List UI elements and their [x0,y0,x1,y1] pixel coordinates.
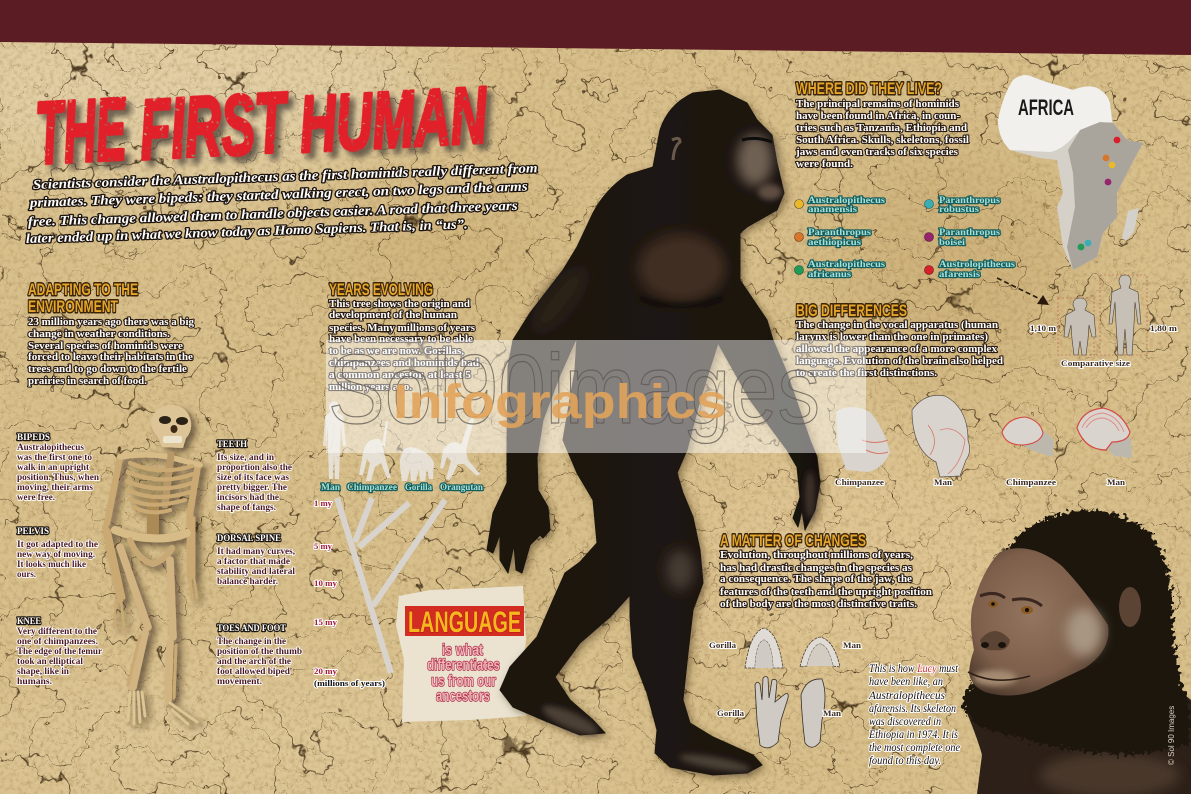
section: where did they live: WHERE DID THEY LIVE? [796,79,942,98]
skull: man [1077,408,1132,458]
skull and head diagrams: Man [934,478,952,487]
time scale labels: 5 my [314,541,333,551]
legend: Australopithecus anamensis: Australopithecus [808,196,885,206]
note: teeth: shape of fangs. [217,502,276,513]
section: adapting to the environment: ENVIRONMENT [28,297,118,316]
Lucy caption: found to this day. [869,755,941,767]
section: where did they live [795,79,969,170]
note: toes and foot: and the arch of the [217,656,292,667]
note: dorsal spine [217,533,296,587]
note: knee: one of chimpanzees. [17,636,98,647]
skeleton illustration [105,405,200,724]
section: adapting to the environment: Several species of hominids were [28,341,183,352]
note: teeth: incisors had the [217,492,280,503]
note: bipeds: was the first one to [17,452,92,463]
map label: AFRICA [1018,95,1074,120]
legend: Australopithecus africanus: Australopithecus [808,260,885,270]
watermark overlay: Infographics [393,376,727,429]
language callout: differentiates [427,657,500,674]
evolution tree chart [314,401,484,688]
jaw, hand and foot diagrams [709,628,861,748]
note: knee: took an elliptical [17,656,83,667]
legend: Australopithecus africanus [794,260,885,280]
man jaw [800,637,840,667]
section: big differences [796,301,1003,379]
note: pelvis: new way of moving. [17,549,95,560]
title: FIRST [137,76,292,178]
comparative size figures: Comparative size [1061,359,1130,368]
note: toes and foot [217,623,302,687]
jaw, hand and foot diagrams: Gorilla [709,641,737,650]
section: big differences: language. Evolution of the brain also helped [796,356,1003,367]
note: toes and foot: The change in the [217,636,287,647]
Lucy caption: the most complete one [869,742,960,754]
section: where did they live: tries such as Tanzania, Ethiopia and [796,123,967,134]
intro text: free. This change allowed them to handle objects easier. A road that three years [28,198,518,229]
note: dorsal spine: balance harder. [217,576,278,587]
jaw, hand and foot diagrams: Gorilla [717,709,745,718]
note: bipeds: Australopithecus [17,442,84,453]
note: pelvis: It looks much like [17,559,87,570]
head: man [912,395,970,477]
Lucy caption: Ethiopia in 1974. It is [868,729,959,741]
note: pelvis: It got adapted to the [17,539,99,550]
note: toes and foot: movement. [217,676,262,687]
skull and head diagrams: Man [1107,478,1125,487]
section: adapting to the environment: ADAPTING TO THE [28,280,138,299]
Lucy caption [868,663,960,767]
legend: Paranthropus aethiopicus [794,228,871,248]
time scale labels: 1 my [314,498,333,508]
note: knee: Very different to the [17,626,98,637]
watermark overlay: Sol90images [328,334,820,444]
map of Africa [998,75,1143,270]
language callout [396,586,526,722]
note: teeth [217,439,293,513]
body silhouette [487,90,820,775]
section: years evolving: a common ancestor, at least 5 [329,370,471,381]
note: pelvis: PELVIS [17,526,49,537]
section: big differences: to create the first distinctions. [796,368,937,379]
legend: Australopithecus africanus: africanus [808,270,851,280]
section: adapting to the environment: forced to leave their habitats in the [28,352,193,363]
note: teeth: TEETH [217,439,247,450]
species labels: Gorilla [405,483,432,493]
legend: Australopithecus anamensis: anamensis [808,205,857,215]
species legend [794,196,1015,280]
section: a matter of changes: of the body are the most distinctive traits. [720,599,917,610]
Lucy caption: have been like, an [869,676,943,688]
legend: Paranthropus boisei [924,228,1000,248]
intro text: primates. They were bipeds: they started walking erect, on two legs and the arms [28,178,528,210]
section: a matter of changes [720,531,932,610]
note: toes and foot: TOES AND FOOT [217,623,287,634]
intro text: Scientists consider the Australopithecus as the first hominids really different from [33,160,538,192]
legend: Paranthropus aethiopicus: aethiopicus [808,238,861,248]
section: where did they live: South Africa. Skulls, skeletons, fossil [796,135,969,146]
title: THE [33,79,130,183]
skull and head diagrams: Chimpanzee [1006,478,1056,487]
section: where did they live: were found. [796,159,853,170]
intro text: later ended up in what we know today as Homo Sapiens. That is, in “us”. [26,216,468,246]
section: a matter of changes: a consequence. The shape of the jaw, the [720,574,912,585]
main figure: Australopithecus [487,90,820,775]
note: pelvis [17,526,99,580]
note: teeth: Its size, and in [217,452,275,463]
arrow to comparative size [997,278,1049,305]
legend: Paranthropus robustus: Paranthropus [939,196,1000,206]
skull and head diagrams: Chimpanzee [835,478,884,487]
head: chimpanzee [836,407,890,472]
gorilla jaw [745,628,783,668]
top band [0,0,1191,55]
legend: Australopithecus anamensis [794,196,885,215]
section: years evolving: to be as we are now. Gorillas, [329,346,464,357]
section: a matter of changes: has had drastic changes in the species as [720,563,912,574]
legend: Paranthropus robustus [924,196,1000,215]
note: dorsal spine: a factor that made [217,556,291,567]
note: teeth: proportion also the [217,462,293,473]
section: adapting to the environment: 23 million years ago there was a big [28,317,195,328]
section: years evolving: YEARS EVOLVING [329,280,433,299]
section: adapting to the environment: prairies in search of food. [28,376,147,387]
species labels: Chimpanzee [347,483,397,493]
legend: Paranthropus boisei: boisei [939,238,965,248]
note: knee [17,616,103,687]
jaw, hand and foot diagrams: Man [823,709,841,718]
time scale labels: 10 my [314,578,338,588]
section: big differences: allowed the appearance of a more complex [796,344,998,355]
note: dorsal spine: It had many curves, [217,546,296,557]
section: where did they live: The principal remains of hominids [796,99,959,110]
section: where did they live: jaws and even tracks of six species [795,147,958,158]
time scale labels: 15 my [314,617,338,627]
note: bipeds: BIPEDS [17,432,50,443]
legend: Austrolopithecus afarensis [924,260,1015,280]
copyright credit: © Sol 90 Images [1167,706,1176,765]
section: adapting to the environment: trees and to go down to the fertile [28,364,187,375]
section: big differences: BIG DIFFERENCES [796,301,907,320]
note: bipeds: moving, their arms [17,482,93,493]
section: years evolving: This tree shows the origin and [329,299,470,310]
time scale labels: 20 my [314,666,338,676]
language callout: us from our [431,673,496,690]
title [33,60,490,184]
section: a matter of changes: A MATTER OF CHANGES [720,531,866,550]
note: bipeds: position. Thus, when [17,472,100,483]
section: big differences: larynx is lower than the one in primates) [796,332,989,343]
gorilla hand [755,676,788,748]
skull: chimpanzee [1002,417,1054,457]
section: years evolving: development of the human [329,310,457,321]
shading on face and body [524,134,815,775]
species labels: Orangutan [440,483,484,493]
species labels: Man [321,483,341,493]
species labels [321,483,484,493]
note: bipeds [17,432,100,503]
time scale labels [314,498,385,688]
note: pelvis: ours. [17,569,36,580]
Lucy caption: Australopithecus [868,690,946,702]
comparative size figures [1030,275,1177,368]
jaw, hand and foot diagrams: Man [843,641,861,650]
section: years evolving: have been necessary to be able [329,334,473,345]
note: bipeds: walk in an upright [17,462,90,473]
title: HUMAN [297,70,490,169]
time scale labels: (millions of years) [314,679,385,688]
note: dorsal spine: DORSAL SPINE [217,533,281,544]
comparative size figures: 1,10 m [1030,324,1056,333]
section: adapting to the environment: change in weather conditions. [28,329,170,340]
section: where did they live: have been found in Africa, in coun- [796,111,961,122]
legend: Austrolopithecus afarensis: afarensis [939,270,980,280]
legend: Paranthropus robustus: robustus [939,205,979,215]
section: a matter of changes: Evolution, throughout millions of years, [720,550,913,561]
legend: Austrolopithecus afarensis: Austrolopithecus [939,260,1015,270]
intro text [26,160,538,246]
Lucy caption: This is how Lucy must [869,663,959,675]
legend: Paranthropus boisei: Paranthropus [939,228,1000,238]
map markers [1078,137,1120,250]
section: a matter of changes: features of the teeth and the upright position [720,587,932,598]
section: adapting to the environment [28,280,195,387]
section: years evolving [329,280,479,393]
note: knee: The edge of the femur [17,646,103,657]
primate silhouettes [323,401,480,481]
legend: Paranthropus aethiopicus: Paranthropus [808,228,871,238]
language callout: is what [442,642,484,659]
skull and head diagrams [835,395,1132,487]
note: teeth: size of its face was [217,472,289,483]
note: toes and foot: foot allowed biped [217,666,291,677]
man foot [801,679,825,747]
note: knee: KNEE [17,616,41,627]
note: toes and foot: position of the thumb [217,646,302,657]
section: years evolving: species. Many millions of years [329,323,475,334]
note: knee: humans. [17,676,52,687]
Lucy portrait [962,510,1191,794]
section: years evolving: million years ago. [329,382,412,393]
Lucy caption: afarensis. Its skeleton [869,703,956,715]
comparative size figures: 1,80 m [1150,324,1177,333]
language callout: ancestors [436,688,490,705]
section: big differences: The change in the vocal apparatus (human [796,320,998,331]
tree branches [337,498,445,673]
note: teeth: pretty bigger. The [217,482,288,493]
note: dorsal spine: stability and lateral [217,566,295,577]
note: knee: shape, like in [17,666,70,677]
Lucy caption: was discovered in [869,716,941,728]
section: years evolving: chimpanzees and hominids had [329,358,479,369]
language callout: LANGUAGE [408,606,521,639]
note: bipeds: were free. [17,492,55,503]
